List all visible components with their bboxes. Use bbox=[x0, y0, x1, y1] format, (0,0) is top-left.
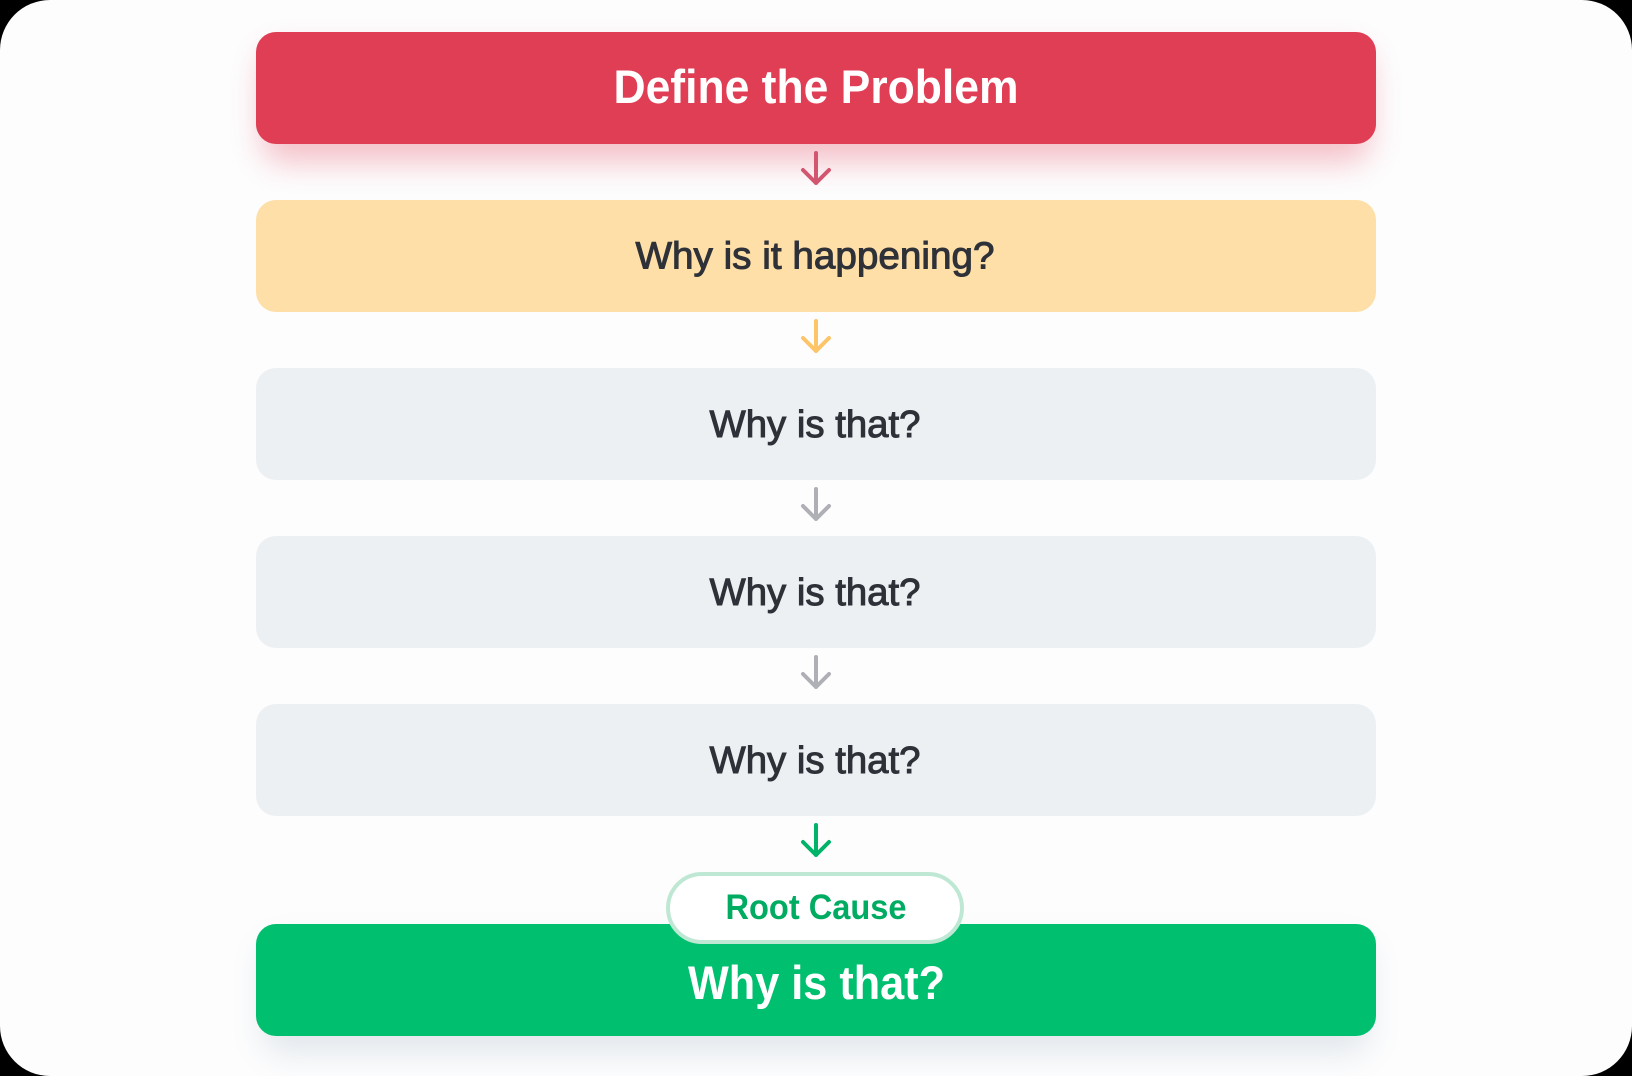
badge: root cause bbox=[668, 874, 962, 942]
panel: why is that 1: Why is that? bbox=[710, 404, 920, 446]
panel: why is it happening: Why is it happening? bbox=[636, 236, 994, 278]
arrow: red bbox=[803, 153, 829, 183]
panel: root cause answer: Why is that? bbox=[688, 956, 945, 1009]
panel: root cause answer bbox=[256, 924, 1376, 1054]
badge: root cause: Root Cause bbox=[726, 888, 906, 927]
arrow: grey 1 bbox=[803, 489, 829, 519]
arrow: yellow bbox=[803, 321, 829, 351]
panel: why is that 2 bbox=[256, 536, 1376, 648]
panel: why is it happening bbox=[256, 200, 1376, 312]
panel: why is that 3 bbox=[256, 704, 1376, 816]
panel: why is that 3: Why is that? bbox=[710, 740, 920, 782]
arrow: green bbox=[803, 825, 829, 855]
panel: why is that 1 bbox=[256, 368, 1376, 480]
arrow: grey 2 bbox=[803, 657, 829, 687]
panel: why is that 2: Why is that? bbox=[710, 572, 920, 614]
panel: define the problem bbox=[256, 32, 1376, 162]
panel: define the problem: Define the Problem bbox=[614, 60, 1018, 113]
